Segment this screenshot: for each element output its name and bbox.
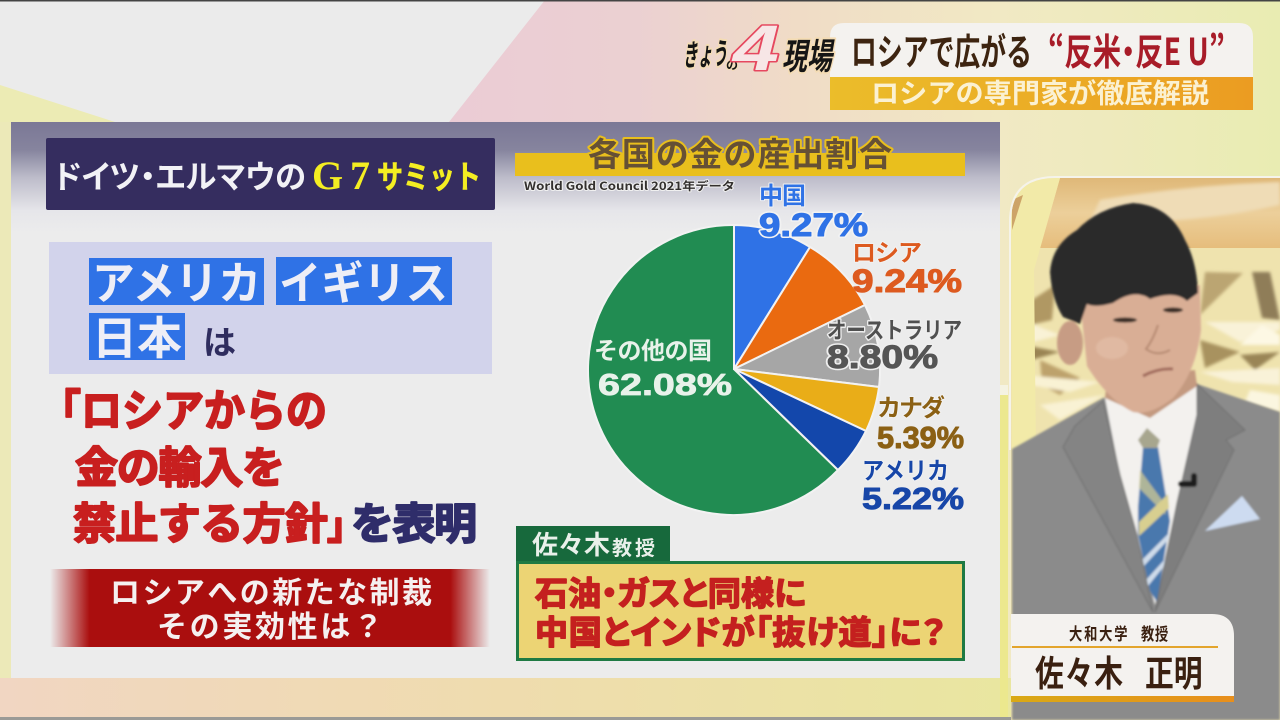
slice: USA [734, 369, 866, 470]
slice: other [588, 225, 838, 515]
label: Russia: 9.24% [852, 263, 962, 299]
headline: “反米・反E U” [1048, 22, 1225, 76]
particle: は [203, 316, 236, 364]
program logo [682, 12, 839, 84]
program logo: の [726, 56, 738, 73]
label: other: その他の国 [594, 331, 712, 366]
name card: 教授 [1141, 621, 1168, 646]
mouth [1143, 369, 1173, 376]
slice: Russia [734, 247, 865, 369]
label: China: 9.27% [759, 207, 868, 243]
photo: professor [1011, 178, 1280, 720]
name card: 正明 [1145, 645, 1203, 697]
shirt [1105, 386, 1197, 605]
hair [1050, 203, 1198, 324]
statement: 禁止する方針 [73, 490, 328, 552]
commentary: professor [516, 525, 964, 660]
statement [40, 375, 477, 552]
comment box [518, 562, 964, 660]
label: USA: アメリカ [862, 451, 949, 486]
label: China: 中国 [759, 176, 806, 211]
label: China: 9.27% [759, 207, 868, 243]
statement: を表明 [351, 490, 477, 552]
label: Australia: 8.80% [827, 339, 938, 375]
banner: sanctions question: その実効性は？ [157, 602, 383, 646]
label: Canada: カナダ [877, 388, 945, 423]
suit [1012, 384, 1280, 720]
main panel [11, 122, 1000, 678]
name card: 大和大学 [1069, 621, 1127, 646]
label: Australia: オーストラリア [827, 311, 962, 345]
name card: 佐々木 [1035, 645, 1123, 697]
program logo: きょう [682, 29, 732, 75]
lapels [1063, 401, 1153, 612]
label: Russia [852, 233, 962, 299]
headline: ロシアで広がる [851, 22, 1032, 76]
photo frame [1010, 177, 1280, 450]
heading: G7 summit: ドイツ・エルマウの [54, 152, 306, 198]
label: other [594, 331, 732, 402]
chart title [515, 128, 965, 176]
label: other: 62.08% [598, 367, 732, 402]
pie chart [588, 225, 880, 515]
label: USA [862, 451, 964, 516]
callout: countries [49, 242, 492, 374]
chart title: 各国の金の産出割合 [588, 128, 892, 176]
chip: UK: イギリス [279, 247, 448, 312]
label: Russia: ロシア [852, 233, 922, 268]
statement: 金の輸入を [75, 434, 285, 496]
heading: G7 summit: サミット [377, 152, 481, 198]
tag: 佐々木 [532, 525, 610, 562]
program logo: 4 [730, 12, 779, 84]
heading: G7 summit [46, 138, 495, 210]
slice: Australia [734, 305, 880, 387]
slice: Canada [734, 369, 879, 431]
eyes [1113, 317, 1137, 323]
microphone [1178, 481, 1195, 487]
heading: G7 summit: G 7 [312, 153, 370, 198]
name card [1011, 614, 1234, 702]
slice: China [734, 225, 810, 369]
label: Australia [827, 311, 962, 375]
label: China [759, 176, 868, 243]
comment box: 石油・ガスと同様に [535, 567, 806, 615]
tag [516, 525, 670, 563]
label: USA: 5.22% [862, 481, 964, 516]
banner: sanctions question: ロシアへの新たな制裁 [110, 568, 432, 612]
comment box: 中国とインドが「抜け道」に？ [535, 606, 945, 654]
tie [1138, 428, 1170, 602]
statement: 「ロシアからの [40, 375, 327, 439]
program logo: 現場 [780, 28, 839, 80]
neck [1105, 370, 1197, 418]
banner: sanctions question [50, 568, 490, 647]
chip: America: アメリカ [92, 247, 261, 312]
label: Canada [877, 388, 964, 455]
face [1080, 285, 1201, 413]
chip: Japan: 日本 [92, 302, 182, 367]
tag: 教授 [612, 532, 655, 561]
nose [1146, 325, 1170, 353]
headline [830, 22, 1253, 77]
label: Australia: 8.80% [827, 339, 938, 375]
source note: World Gold Council 2021年データ [524, 178, 735, 194]
ear [1057, 321, 1083, 365]
sub-headline: ロシアの専門家が徹底解説 [871, 72, 1209, 111]
statement: 」 [327, 495, 365, 550]
label: Canada: 5.39% [877, 420, 964, 455]
pocket square [1205, 496, 1260, 531]
